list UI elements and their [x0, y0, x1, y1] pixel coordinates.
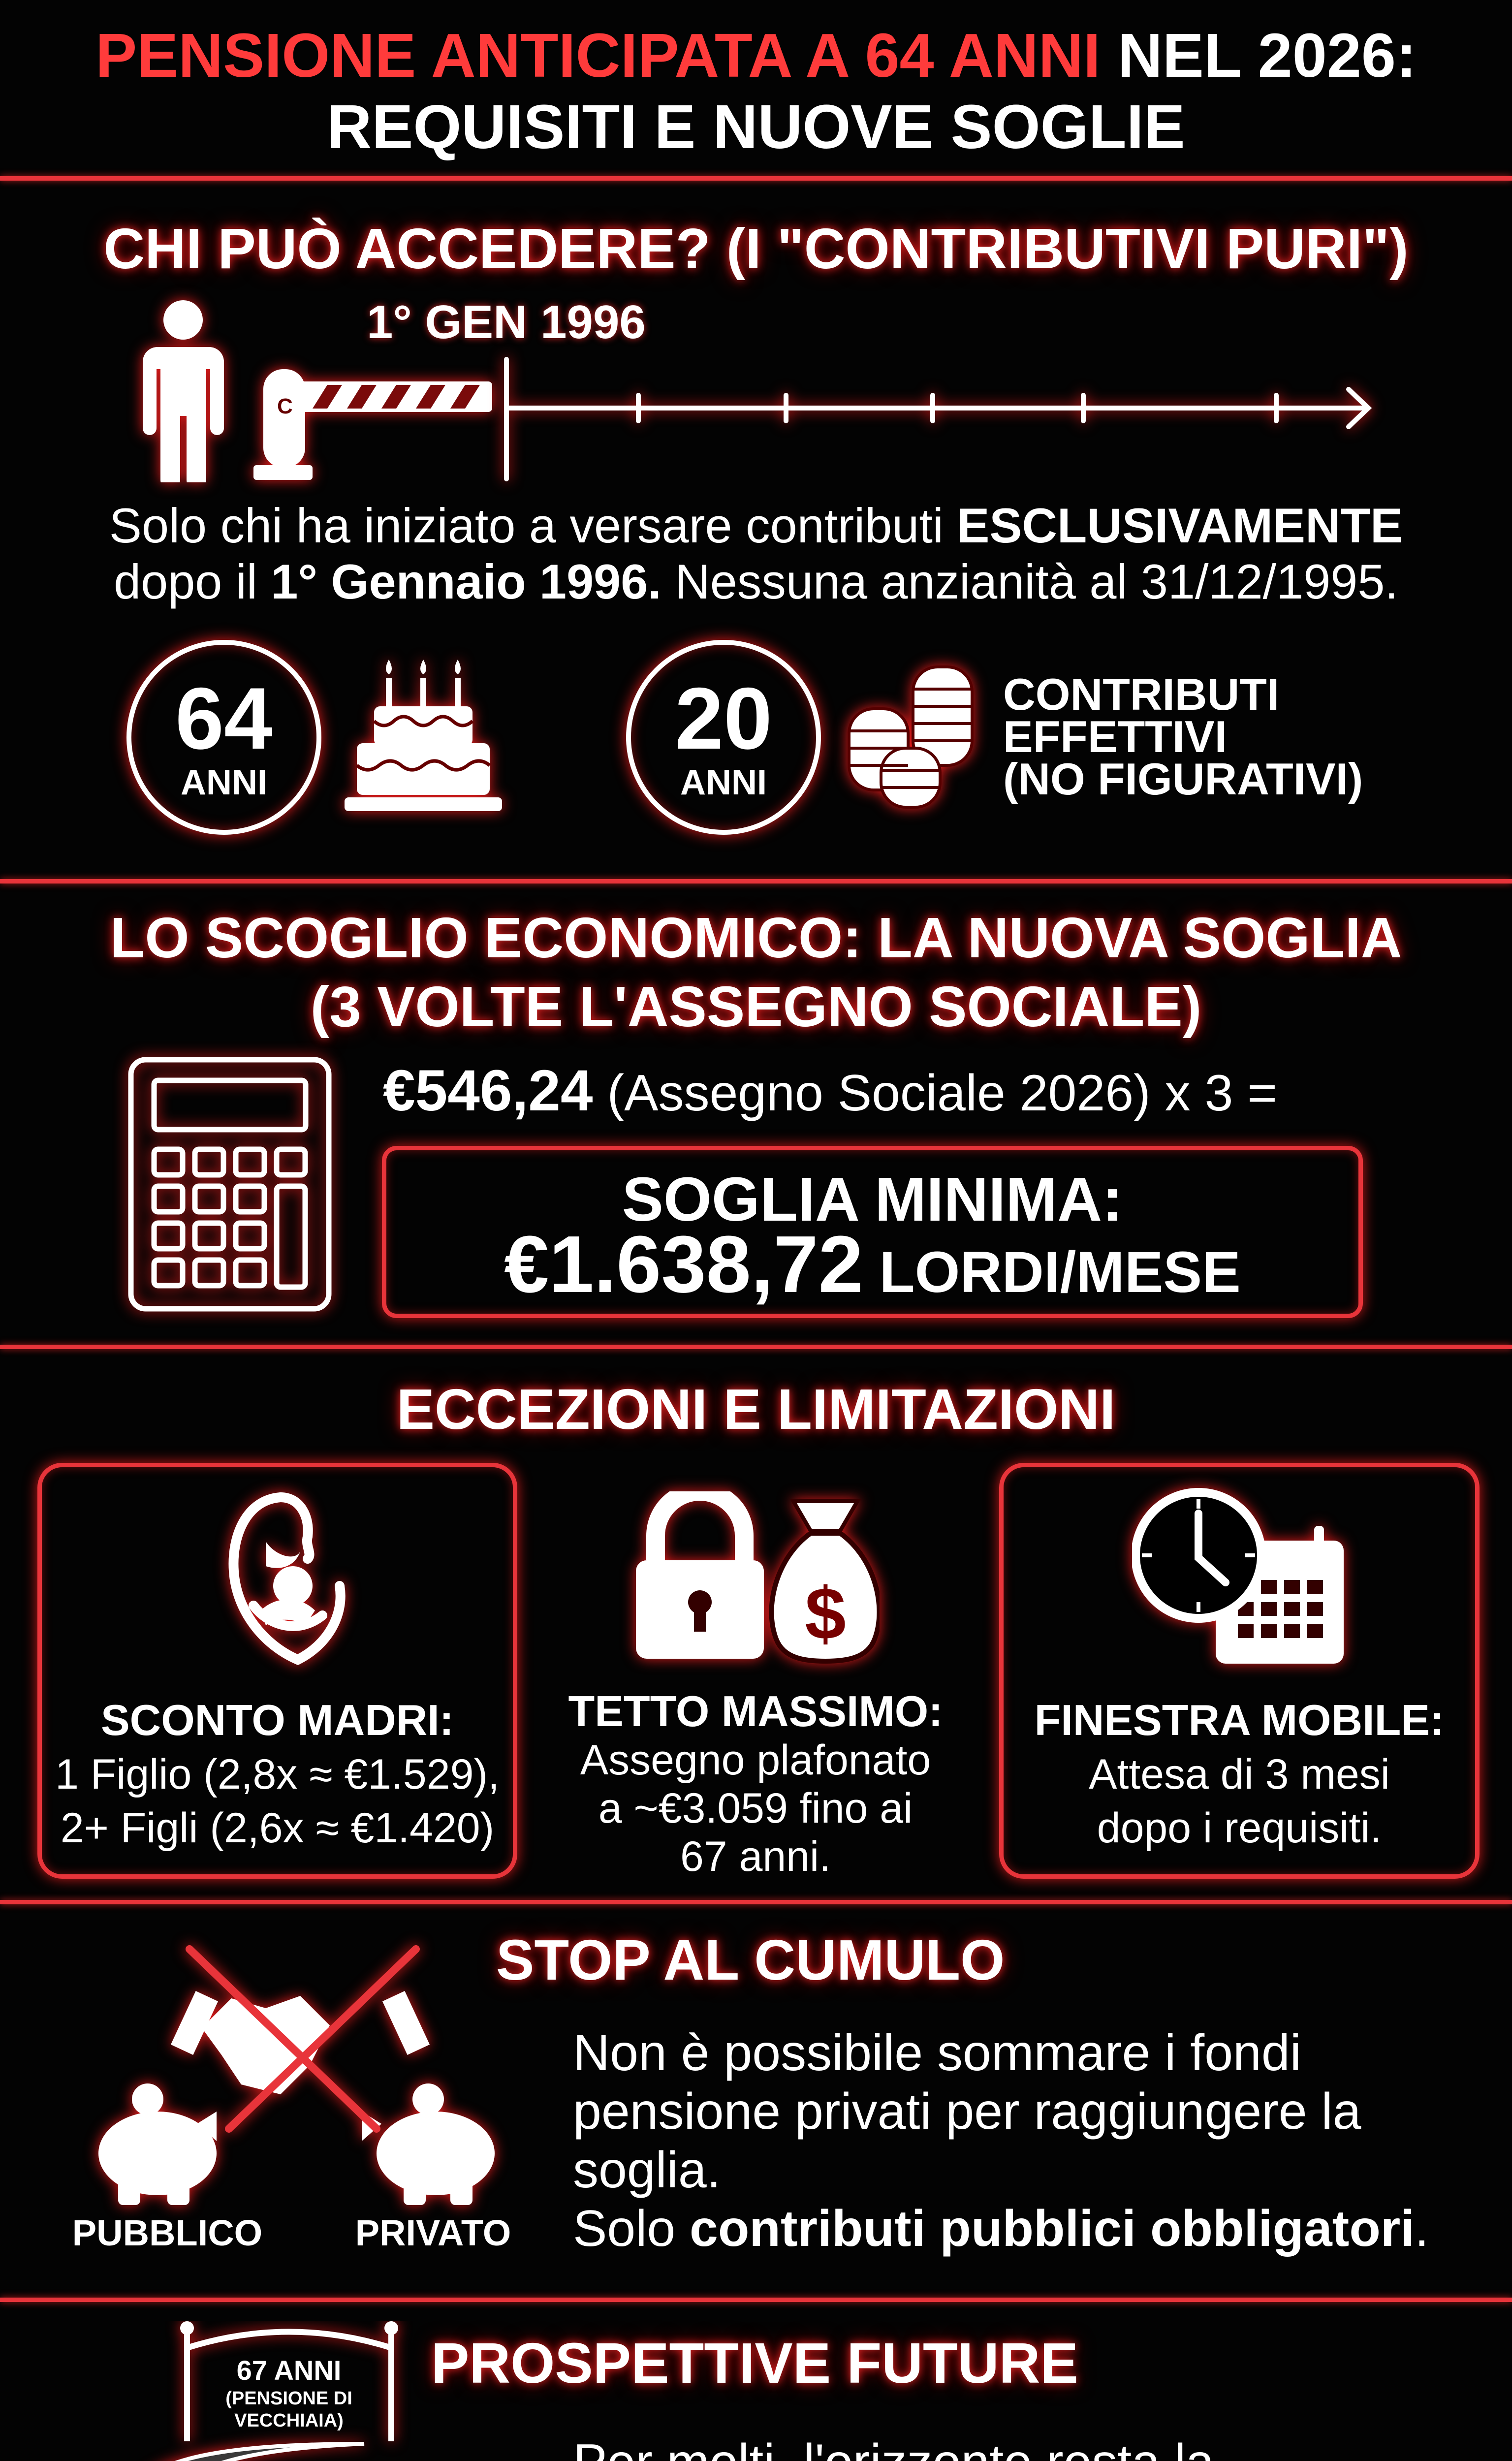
- card: tetto massimo: [536, 1489, 975, 1883]
- title: REQUISITI E NUOVE SOGLIE: [327, 92, 1185, 161]
- icon: road with gate: (PENSIONE DI: [225, 2388, 352, 2409]
- icon: clock and calendar: [1132, 1486, 1349, 1669]
- icon: road with gate: VECCHIAIA): [234, 2410, 344, 2431]
- text: finestra mobile: Attesa di 3 mesi: [1089, 1751, 1390, 1798]
- text: stop al cumulo: Solo contributi pubblici obbligatori.: [573, 2200, 1429, 2257]
- text: tetto massimo: a ~€3.059 fino ai: [598, 1785, 913, 1832]
- timeline arrow: [493, 350, 1379, 488]
- text: sconto madri: SCONTO MADRI:: [101, 1696, 454, 1744]
- label: 1 gen 1996: 1° GEN 1996: [367, 296, 646, 348]
- icon: barrier: [243, 358, 503, 491]
- heading: scoglio economico: (3 VOLTE L'ASSEGNO SOCIALE): [311, 975, 1201, 1039]
- heading: prospettive future: PROSPETTIVE FUTURE: [431, 2331, 1078, 2395]
- heading: scoglio economico: LO SCOGLIO ECONOMICO: LA NUOVA SOGLIA: [110, 906, 1402, 970]
- text: tetto massimo: 67 anni.: [680, 1833, 831, 1880]
- text: solo chi ha iniziato: [109, 498, 1403, 609]
- box: soglia minima: [382, 1146, 1363, 1318]
- text: stop al cumulo: Non è possibile sommare i fondi: [573, 2024, 1301, 2082]
- text: formula: €546,24 (Assegno Sociale 2026) x 3 =: [383, 1058, 1277, 1123]
- badge: 20 anni: 20: [675, 669, 772, 767]
- box: soglia minima: SOGLIA MINIMA:: [622, 1165, 1123, 1234]
- text: stop al cumulo: pensione privati per raggiungere la: [573, 2083, 1361, 2140]
- icon: road with gate: 67 ANNI: [237, 2355, 341, 2386]
- box: soglia minima: €1.638,72 LORDI/MESE: [504, 1219, 1241, 1309]
- text: tetto massimo: TETTO MASSIMO:: [568, 1687, 943, 1735]
- card: sconto madri: [0, 0, 1512, 5]
- text: solo chi ha iniziato: dopo il 1° Gennaio 1996. Nessuna anzianità al 31/12/1995.: [114, 554, 1398, 609]
- text: sconto madri: 1 Figlio (2,8x ≈ €1.529),: [55, 1751, 500, 1798]
- text: tetto massimo: [536, 1687, 975, 1881]
- text: sconto madri: [37, 1693, 517, 1855]
- text: stop al cumulo: soglia.: [573, 2142, 721, 2199]
- text: tetto massimo: Assegno plafonato: [580, 1736, 931, 1784]
- icon: mother: [207, 1487, 349, 1667]
- icon: lock and money bag: $: [805, 1572, 846, 1655]
- text: finestra mobile: dopo i requisiti.: [1097, 1804, 1382, 1852]
- icon: piggy banks with crossed handshake: [84, 1939, 517, 2215]
- icon: lock and money bag: [631, 1491, 880, 1664]
- title: PENSIONE ANTICIPATA A 64 ANNI NEL 2026:: [95, 21, 1417, 90]
- label: pubblico: PUBBLICO: [72, 2212, 262, 2253]
- icon: coins: [836, 655, 985, 820]
- text: contributi effettivi: [1003, 670, 1363, 804]
- text: sconto madri: 2+ Figli (2,6x ≈ €1.420): [61, 1804, 494, 1852]
- badge: 64 anni: 64: [175, 669, 273, 767]
- heading: chi può accedere: CHI PUÒ ACCEDERE? (I "CONTRIBUTIVI PURI"): [103, 217, 1409, 281]
- text: solo chi ha iniziato: Solo chi ha iniziato a versare contributi ESCLUSIVAMENTE: [109, 498, 1403, 553]
- label: privato: PRIVATO: [355, 2212, 511, 2253]
- heading: stop al cumulo: STOP AL CUMULO: [496, 1928, 1005, 1992]
- text: stop al cumulo: [573, 2024, 1429, 2258]
- title: [95, 21, 1417, 161]
- heading: eccezioni: ECCEZIONI E LIMITAZIONI: [397, 1377, 1115, 1441]
- icon: road with gate: [39, 2321, 413, 2461]
- text: contributi effettivi: (NO FIGURATIVI): [1003, 755, 1363, 804]
- text: finestra mobile: FINESTRA MOBILE:: [1035, 1696, 1444, 1744]
- text: contributi effettivi: CONTRIBUTI: [1003, 670, 1279, 720]
- heading: scoglio economico: [100, 906, 1409, 1046]
- badge: 64 anni: ANNI: [181, 763, 267, 802]
- badge: 20 anni: [626, 640, 821, 835]
- icon: cake: [335, 655, 512, 822]
- badge: 64 anni: [126, 640, 321, 835]
- icon: barrier: C: [277, 394, 293, 418]
- icon: person: [131, 290, 235, 493]
- icon: calculator: [117, 1045, 343, 1323]
- badge: 20 anni: ANNI: [680, 763, 767, 802]
- text: contributi effettivi: EFFETTIVI: [1003, 712, 1227, 762]
- text: finestra mobile: [999, 1693, 1480, 1855]
